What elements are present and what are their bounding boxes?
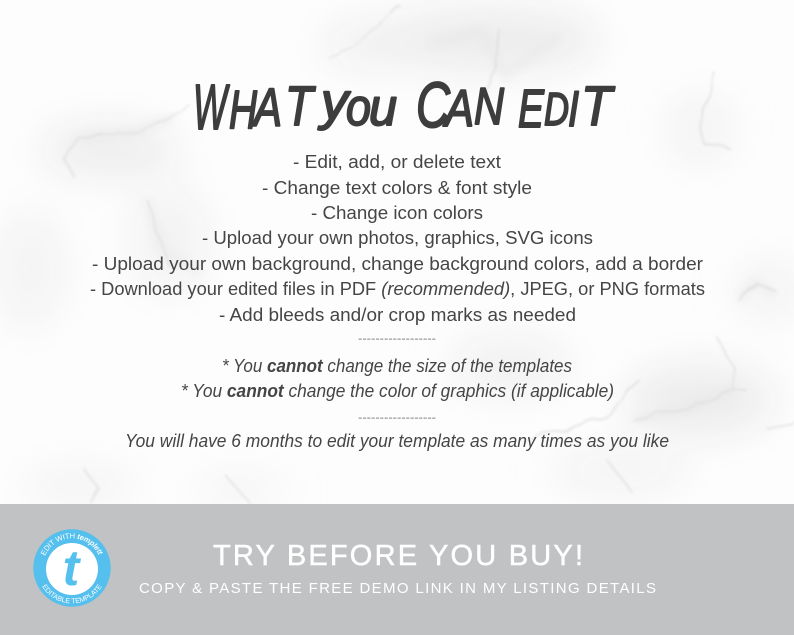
list of editable features: - Download your edited files in PDF (recommended), JPEG, or PNG formats [90, 279, 705, 299]
divider: ------------------ [358, 334, 436, 345]
list of editable features [90, 152, 705, 325]
limitations: * You cannot change the color of graphics (if applicable) [181, 381, 614, 401]
footer band [0, 504, 794, 635]
title: D [544, 83, 569, 135]
title: A [442, 80, 474, 138]
title: T [581, 74, 615, 137]
badge: edit with templett [33, 529, 111, 607]
title [193, 69, 615, 143]
list of editable features: - Add bleeds and/or crop marks as needed [219, 305, 576, 325]
badge: edit with templett: t [63, 540, 82, 596]
title: W [193, 71, 230, 143]
footer subheading: COPY & PASTE THE FREE DEMO LINK IN MY LISTING DETAILS [139, 580, 656, 597]
title: T [285, 74, 316, 137]
title: E [518, 79, 545, 139]
title: y [318, 73, 351, 131]
limitations: * You cannot change the size of the templates [222, 356, 572, 376]
title: I [568, 81, 579, 137]
badge: edit with templett: EDIT WITH templett [40, 533, 103, 556]
footer heading: TRY BEFORE YOU BUY! [213, 540, 583, 572]
marble background [0, 0, 794, 504]
title: A [252, 78, 282, 138]
list of editable features: - Change text colors & font style [262, 178, 532, 198]
badge: edit with templett: EDITABLE TEMPLATE [42, 584, 102, 604]
limitations [181, 356, 614, 401]
title: o [346, 79, 371, 137]
list of editable features: - Edit, add, or delete text [293, 152, 501, 172]
list of editable features: - Upload your own background, change background colors, add a border [92, 254, 703, 274]
title: C [416, 69, 451, 141]
edit period note: You will have 6 months to edit your template as many times as you like [125, 431, 669, 451]
title: N [474, 78, 504, 136]
list of editable features: - Change icon colors [311, 203, 483, 223]
divider: ------------------ [358, 413, 436, 424]
title: u [369, 79, 397, 137]
list of editable features: - Upload your own photos, graphics, SVG icons [202, 228, 593, 248]
title: H [229, 80, 258, 140]
